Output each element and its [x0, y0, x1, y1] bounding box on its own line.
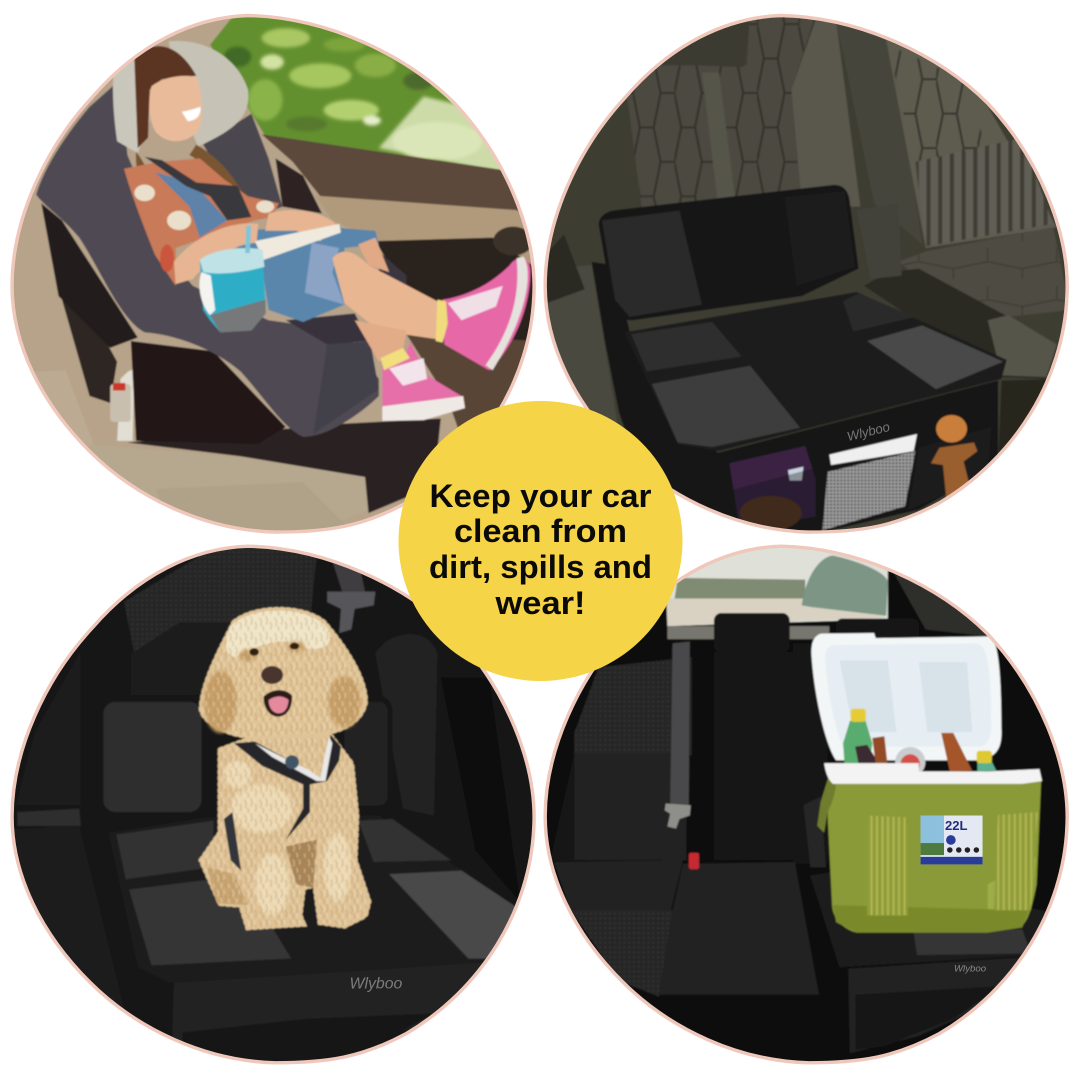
protector mat — [803, 797, 1050, 1053]
book — [255, 224, 341, 260]
panel: dog on seat protector — [10, 544, 536, 1064]
car interior — [17, 548, 519, 899]
seat belt and buckle — [665, 642, 699, 869]
jeans — [214, 227, 379, 322]
head — [201, 610, 365, 736]
rear seats — [550, 613, 919, 1077]
brand mark: Wlyboo — [845, 419, 891, 444]
brand mark: Wlyboo — [350, 976, 403, 993]
leather rear seats — [545, 14, 1070, 461]
handle — [817, 774, 836, 833]
cooler — [811, 633, 1042, 933]
pad backrest — [599, 185, 859, 320]
brand mark: Wlyboo — [954, 964, 987, 975]
car window with foliage — [210, 17, 500, 170]
pad front panel — [710, 381, 998, 534]
panel: seat protector on leather seat — [544, 14, 1069, 534]
callout text: dirt, spills and — [429, 549, 652, 585]
vehicle seat — [62, 299, 135, 442]
legs — [332, 252, 441, 339]
panel: cooler on seat protector — [533, 533, 1080, 1080]
face — [149, 76, 202, 141]
callout text: clean from — [454, 513, 627, 549]
panel: child in car seat — [10, 14, 536, 534]
cooler body — [828, 781, 1041, 933]
pad seat — [116, 818, 515, 966]
shirt — [124, 158, 279, 286]
harness — [234, 735, 341, 840]
arms — [174, 223, 258, 284]
callout text: wear! — [494, 585, 586, 621]
overalls and harness — [155, 172, 227, 238]
child — [124, 46, 530, 421]
door panel — [262, 134, 537, 448]
sneakers — [443, 258, 530, 370]
sippy cup — [199, 226, 266, 332]
hair — [134, 46, 196, 148]
headrest — [113, 41, 248, 153]
cooler rim — [824, 763, 1042, 784]
product label — [921, 816, 983, 864]
car seat shell — [36, 79, 406, 444]
protective mat — [127, 418, 441, 513]
callout: yellow circle with message — [398, 401, 682, 681]
pad underlay shadow — [592, 262, 719, 530]
bottles — [843, 709, 996, 777]
rear window — [665, 548, 986, 641]
callout text — [429, 478, 652, 621]
dog — [201, 610, 369, 927]
lid — [811, 633, 1001, 760]
body — [201, 736, 369, 927]
callout text: Keep your car — [430, 478, 652, 514]
product label: 22L — [945, 818, 968, 833]
pad front panel — [173, 962, 482, 1041]
pad backrest — [96, 695, 393, 819]
pad seat — [624, 292, 1007, 451]
organizer pockets — [723, 415, 991, 530]
